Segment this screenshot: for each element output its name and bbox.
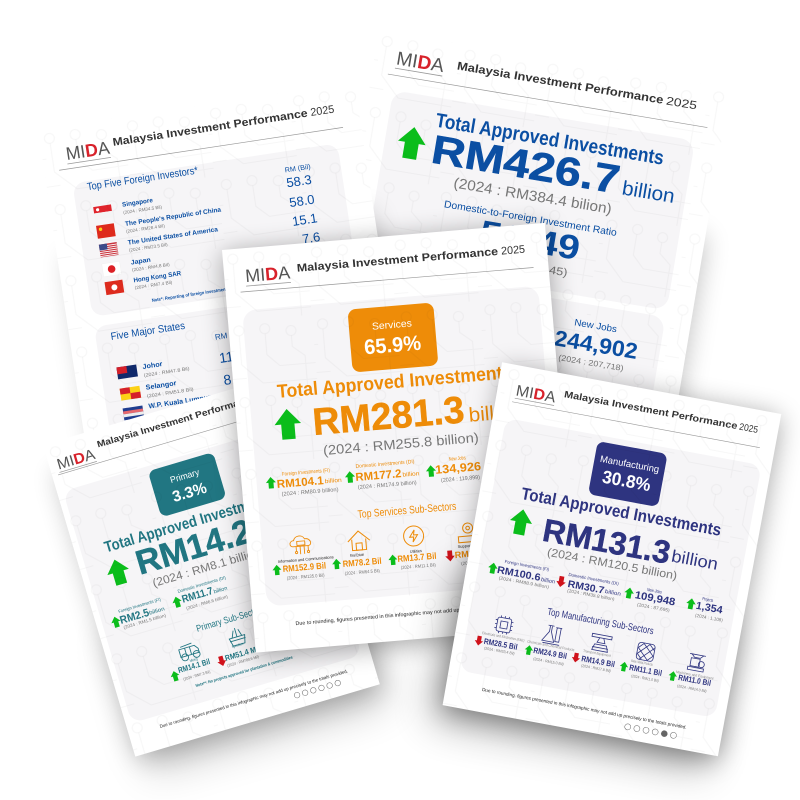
heading: total approved investments: Total Approved Investments — [520, 484, 723, 540]
shadow of manufacturing sheet — [442, 367, 781, 760]
row: Singapore — [93, 172, 313, 220]
flag: Hong Kong — [105, 280, 124, 295]
stat: domestic investments — [344, 459, 420, 492]
stat: domestic investments: Domestic Investments (DI) — [177, 575, 227, 594]
stat: domestic investments: (2024 : RM35.8 billion) — [567, 588, 615, 602]
stat: foreign investments: RM104.1 — [276, 475, 325, 491]
arrow: increase — [169, 670, 181, 682]
stat: new jobs — [622, 583, 677, 614]
comparison: 2024 total: (2024 : RM255.8 billion) — [323, 430, 479, 458]
stat: information and communications: RM152.9 Bil — [282, 560, 326, 574]
panel: manufacturing sector figures — [459, 418, 762, 718]
stat: foreign investments: billion — [540, 577, 555, 586]
row: Selangor: Selangor — [145, 380, 177, 392]
stat: new jobs: (2024 : 119,899) — [441, 475, 480, 484]
icon: cloud network — [289, 535, 312, 555]
value: RM14.2: RM14.2 — [131, 512, 256, 583]
row: W.P. Kuala Lumpur — [122, 394, 213, 420]
stat: domestic investments: Domestic Investments (DI) — [355, 459, 415, 470]
row: Japan — [101, 229, 321, 277]
stat: chemicals: RM24.9 Bil — [533, 646, 568, 661]
stat: new jobs — [425, 454, 483, 485]
note: foreign investment reporting: Note*: Reporting of foreign investment — [151, 287, 228, 303]
stat: support services — [443, 521, 490, 567]
icon: transport equipment — [590, 633, 612, 653]
icon: flasks — [541, 624, 562, 645]
row: China: 58.0 — [288, 192, 316, 210]
tile: services share: Services — [372, 318, 412, 333]
heading: total approved investments: Total Approved Investments — [434, 110, 665, 170]
stat: machinery and equipment: Machinery and Equipment — [676, 670, 714, 681]
tile: primary share: Primary — [169, 467, 201, 485]
stat: new jobs: 109,948 — [634, 589, 676, 608]
stat: projects: (2024 : 1,108) — [695, 613, 724, 623]
flag: China — [96, 223, 116, 239]
value: RM281.3: RM281.3 — [311, 389, 466, 444]
panel: primary sector figures — [63, 423, 362, 723]
heading: total approved investments: Total Approved Investments — [276, 362, 513, 403]
unit: billion: billion — [620, 177, 676, 208]
stat: new jobs: 134,926 — [435, 459, 482, 477]
stat: mining: Mining — [189, 657, 198, 663]
heading: report title — [112, 104, 335, 149]
stat: foreign investments: Foreign Investments (FI) — [504, 559, 550, 572]
stat: transport equipment: (2024 : RM17.8 Bil) — [581, 664, 612, 673]
row: Johor: 11 — [218, 348, 235, 366]
sheet: primary sector — [43, 371, 390, 776]
unit: billion: billion — [670, 547, 720, 574]
stat: projects: 1,354 — [695, 600, 724, 617]
arrow: increase — [273, 408, 302, 440]
stat: transport equipment: Transport Equipment — [583, 649, 611, 658]
heading: report title — [563, 389, 759, 436]
stat: domestic investments: RM30.7 — [567, 579, 606, 597]
stat: domestic investments: (2024 : RM6.6 billion) — [186, 594, 229, 611]
page background — [38, 82, 415, 530]
stat: real estate: (2024 : RM64.5 Bil) — [345, 568, 380, 576]
tile: primary share: 3.3% — [170, 480, 209, 506]
stat: foreign investments: Foreign Investments (FI) — [118, 597, 162, 614]
arrow: increase — [487, 562, 499, 574]
tile: manufacturing share: 30.8% — [601, 467, 652, 495]
arrow: increase — [265, 477, 276, 489]
stat: domestic investments: (2024 : RM174.9 billion) — [358, 480, 417, 491]
arrow: increase — [110, 615, 122, 629]
row: Hong Kong SAR: Hong Kong SAR — [133, 270, 182, 284]
comparison: 2024 total: (2024 : RM120.5 billion) — [546, 547, 678, 583]
stat: information and communications — [270, 533, 335, 582]
social icons — [624, 723, 677, 739]
row: Singapore: Singapore — [122, 197, 154, 209]
stat: new jobs: New Jobs — [449, 455, 466, 463]
row: United States: 15.1 — [291, 210, 318, 229]
row: Japan: Japan — [130, 257, 151, 267]
arrow: increase — [668, 670, 678, 681]
stat: support services: (2024 — [461, 560, 473, 566]
heading: report title: 2025 — [665, 95, 698, 112]
heading: report title — [296, 244, 526, 275]
stat: real estate — [330, 529, 383, 577]
heading: report title: 2025 — [256, 386, 279, 402]
logo: MIDA: MIDA — [244, 262, 291, 286]
label: new jobs: New Jobs — [573, 317, 618, 335]
stat: domestic investments: billion — [213, 586, 228, 595]
tile: manufacturing share — [588, 441, 668, 507]
page background — [306, 30, 730, 528]
stat: electricals and electronics: (2024 : RM33.4 Bil) — [484, 646, 516, 656]
heading: report title: Malaysia Investment Performance — [456, 60, 664, 107]
stat: domestic investments: Domestic Investments (DI) — [568, 572, 620, 586]
logo: MIDA: MIDA — [515, 382, 558, 407]
stat: electricals and electronics: RM28.5 Bil — [483, 637, 518, 652]
stat: basic metal products: RM11.1 Bil — [629, 663, 663, 678]
panel: new jobs — [346, 267, 666, 426]
heading: report title: Malaysia Investment Performance — [563, 389, 738, 432]
comparison: 2024 total: (2024 : RM8.1 billion) — [151, 546, 265, 590]
stat: chemicals — [523, 622, 578, 668]
stat: electricals and electronics: Electricals and Electronics (E&E) — [482, 631, 525, 643]
flag: Johor — [116, 364, 138, 379]
stat: domestic investments — [555, 570, 623, 603]
panel: services sector figures — [242, 286, 563, 606]
stat: foreign investments — [108, 596, 167, 633]
arrow: increase — [272, 565, 282, 575]
row: Selangor — [119, 371, 233, 404]
stat: basic metal products: (2024 : RM11.0 Bil) — [631, 674, 660, 683]
icon: metal mesh — [636, 642, 656, 662]
sheet: manufacturing sector — [430, 361, 781, 773]
shadow of overall sheet — [309, 179, 705, 528]
tile: manufacturing share: Manufacturing — [599, 454, 660, 476]
sheet: foreign investors and states — [38, 82, 415, 530]
panel: total approved investments — [365, 90, 695, 310]
social icons — [294, 680, 341, 699]
stat: foreign investments: RM100.6 — [496, 565, 542, 584]
logo: MIDA: MIDA — [395, 48, 446, 77]
stat: projects: Projects — [702, 596, 714, 603]
flag: Selangor — [120, 386, 141, 401]
heading: report title: Malaysia Investment Performance — [296, 246, 499, 275]
stat: foreign investments: (2024 : RM88.9 billion) — [498, 575, 550, 590]
arrow: increase — [332, 559, 342, 569]
stat: foreign investments: billion — [325, 478, 342, 485]
arrow: increase — [171, 595, 183, 609]
arrow: increase — [395, 125, 428, 161]
stat: support services: Support Services — [457, 541, 488, 549]
stat: projects — [684, 593, 727, 623]
row: W.P. Kuala Lumpur: W.P. Kuala Lumpur — [148, 394, 212, 411]
stat: foreign investments: RM2.5 — [118, 607, 151, 627]
row: Selangor: (2024 : RM51.8 Bil) — [147, 387, 194, 400]
stat: mining: RM14.1 Bil — [177, 657, 211, 675]
panel: five major states — [94, 287, 383, 485]
stat: mining: (2024 : RM7.3 Bil) — [183, 669, 211, 682]
stat: machinery and equipment: RM11.0 Bil — [678, 673, 712, 688]
stat: foreign investments: (2024 : RM1.5 billion) — [123, 613, 167, 630]
row: China — [96, 192, 316, 239]
value: RM131.3: RM131.3 — [540, 512, 673, 571]
arrow: increase — [524, 644, 534, 655]
flag: United States — [99, 242, 119, 258]
flag: W.P. Kuala Lumpur — [123, 405, 144, 420]
heading: report title — [96, 386, 279, 449]
stat: domestic investments: RM177.2 — [355, 468, 402, 484]
arrow: decrease — [571, 652, 581, 663]
footnote: rounding: Due to rounding, figures presented in this infographic may not add up precisely to the totals provided. — [159, 668, 348, 729]
unit: billion: billion — [468, 400, 522, 427]
stat: machinery and equipment: (2024 : RM14.0 Bil) — [677, 684, 708, 694]
flag: Japan — [102, 261, 121, 277]
tile: services share: 65.9% — [363, 332, 422, 359]
stat: agriculture — [209, 623, 262, 670]
arrow: increase — [345, 471, 356, 483]
stat: domestic investments: billion — [402, 471, 420, 479]
row: Japan: (2024 : RM4.8 Bil) — [132, 262, 170, 272]
row: Selangor: 8 — [222, 371, 233, 388]
row: Hong Kong SAR: (2024 : RM7.4 Bil) — [134, 280, 173, 290]
row: Hong Kong SAR — [104, 270, 183, 295]
stat: transport equipment — [570, 630, 620, 674]
stat: chemicals: Chemicals and Chemical Products — [527, 640, 575, 652]
row: United States — [99, 210, 318, 258]
icon: microchip — [493, 615, 514, 635]
stat: agriculture: (2024 : RM700.6 Mil) — [227, 654, 260, 668]
stat: agriculture: Agriculture — [231, 642, 244, 649]
stat: transport equipment: RM14.9 Bil — [581, 654, 616, 669]
row: United States: The United States of America — [127, 226, 219, 247]
value: ratio: 51:49 — [477, 214, 583, 268]
value: new jobs: 244,902 — [553, 325, 640, 364]
row: Singapore: 58.3 — [285, 172, 313, 190]
row: Japan: 7.6 — [301, 229, 321, 247]
heading: top services sub-sectors: Top Services Sub-Sectors — [357, 501, 457, 521]
shadow of primary sheet — [55, 401, 381, 760]
stat: utilities: RM13.7 Bil — [397, 551, 437, 564]
stat: electricals and electronics — [473, 611, 528, 657]
footnote: rounding: Due to rounding, figures presented in this infographic may not add up precisely to the totals provided. — [482, 687, 687, 730]
stat: domestic investments: RM11.7 — [180, 585, 215, 606]
row: Johor: Johor — [142, 361, 163, 371]
arrow: increase — [426, 465, 437, 477]
stat: new jobs: (2024 : 87,695) — [637, 602, 671, 613]
shadow of investors sheet — [65, 211, 415, 529]
stat: machinery and equipment — [667, 650, 717, 694]
sheet: overall investment performance — [306, 30, 730, 528]
stat: utilities — [386, 524, 437, 571]
note: no projects approved: Note**: No projects approved for plantation & commodities — [195, 654, 294, 688]
stat: domestic investments: billion — [604, 589, 621, 598]
icon: house — [347, 530, 371, 551]
stat: information and communications: Information and Communications — [278, 554, 334, 564]
panel: top five foreign investors — [72, 143, 358, 317]
heading: report title: Malaysia Investment Performance — [112, 108, 308, 149]
arrow: increase — [685, 598, 697, 610]
page background — [439, 362, 781, 756]
heading: report title: 2025 — [310, 104, 335, 119]
arrow: increase — [104, 556, 133, 587]
arrow: increase — [619, 661, 629, 672]
column label: RM billions: RM (Bil) — [284, 164, 311, 174]
stat: support services: RM1 — [454, 549, 474, 560]
footnote: rounding: Due to rounding, figures presented in this infographic may not add up precisely to the totals provided. — [295, 601, 535, 627]
stat: domestic investments — [169, 575, 232, 614]
stat: agriculture: RM51.4 Mil — [224, 644, 261, 663]
row: Johor: (2024 : RM47.8 Bil) — [144, 366, 190, 379]
icon: gear and hand — [457, 522, 478, 543]
heading: report title — [456, 60, 698, 112]
arrow: increase — [623, 587, 635, 599]
stat: basic metal products: Basic Metal Products — [631, 659, 653, 667]
soft floor shadow of manufacturing sheet — [430, 568, 733, 771]
stat: foreign investments: billion — [148, 606, 166, 617]
comparison: 2024 ratio: (2024 : 55:45) — [488, 254, 568, 279]
page background — [222, 223, 579, 653]
stat: new jobs: New Jobs — [647, 587, 663, 595]
value: RM426.7: RM426.7 — [428, 128, 623, 202]
heading: report title: 2025 — [501, 244, 526, 258]
arrow: increase — [508, 507, 534, 537]
heading: primary sub-sectors: Primary Sub-Sectors — [195, 604, 266, 635]
stat: foreign investments: (2024 : RM80.9 billion) — [281, 487, 339, 498]
flag: Singapore — [93, 204, 113, 220]
stat: foreign investments — [486, 556, 557, 590]
stat: utilities: Utilities — [410, 548, 422, 554]
stat: information and communications: (2024 : RM135.0 Bil) — [286, 573, 325, 581]
row: Johor — [116, 348, 235, 383]
stat: foreign investments — [265, 467, 343, 499]
stat: real estate: RM78.2 Bil — [342, 556, 382, 569]
unit: billion: billion — [253, 513, 300, 542]
logo: MIDA: MIDA — [64, 138, 111, 164]
stat: utilities: (2024 : RM11.1 Bil) — [401, 562, 436, 570]
arrow: decrease — [216, 655, 227, 667]
row: Singapore: (2024 : RM34.5 Bil) — [123, 204, 163, 215]
column label: RM: RM — [214, 331, 228, 342]
icon: mining truck — [178, 641, 201, 662]
heading: investment ratio: Domestic-to-Foreign Investment Ratio — [443, 199, 618, 239]
arrow: decrease — [474, 635, 484, 646]
stat: mining — [163, 639, 213, 685]
stat: real estate: Real Estate — [350, 552, 365, 558]
row: United States: (2024 : RM23.5 Bil) — [129, 242, 168, 253]
comparison: 2024 jobs: (2024 : 207,718) — [558, 353, 625, 373]
arrow: decrease — [555, 575, 567, 588]
comparison: 2024 total: (2024 : RM384.4 bilion) — [452, 176, 613, 218]
stat: basic metal products — [618, 639, 667, 683]
heading: top manufacturing sub-sectors: Top Manufacturing Sub-Sectors — [546, 607, 654, 637]
tile: services share — [347, 303, 438, 372]
stat: chemicals: (2024 : RM15.0 Bil) — [533, 657, 565, 667]
soft floor shadow of primary sheet — [109, 563, 390, 773]
heading: report title: Malaysia Investment Performance — [96, 393, 257, 449]
heading: report title: 2025 — [738, 422, 759, 436]
icon: machinery — [687, 653, 706, 672]
heading: five major states: Five Major States — [110, 320, 186, 343]
row: China: (2024 : RM28.4 Bil) — [126, 223, 166, 234]
heading: top five foreign investors: Top Five Foreign Investors* — [86, 165, 199, 193]
heading: total approved investments: Total Approved Investments — [102, 490, 277, 556]
page background — [43, 373, 380, 757]
row: China: The People's Republic of China — [125, 207, 222, 228]
icon: agriculture basket — [227, 626, 247, 647]
arrow: decrease — [445, 550, 455, 562]
logo: MIDA: MIDA — [55, 446, 97, 473]
stat: foreign investments: Foreign Investments (FI) — [282, 468, 330, 478]
tile: primary share — [148, 452, 227, 517]
shadow of services sheet — [222, 227, 579, 657]
arrow: increase — [388, 554, 398, 565]
sheet: services sector — [222, 223, 579, 657]
icon: energy bolt — [403, 525, 424, 547]
